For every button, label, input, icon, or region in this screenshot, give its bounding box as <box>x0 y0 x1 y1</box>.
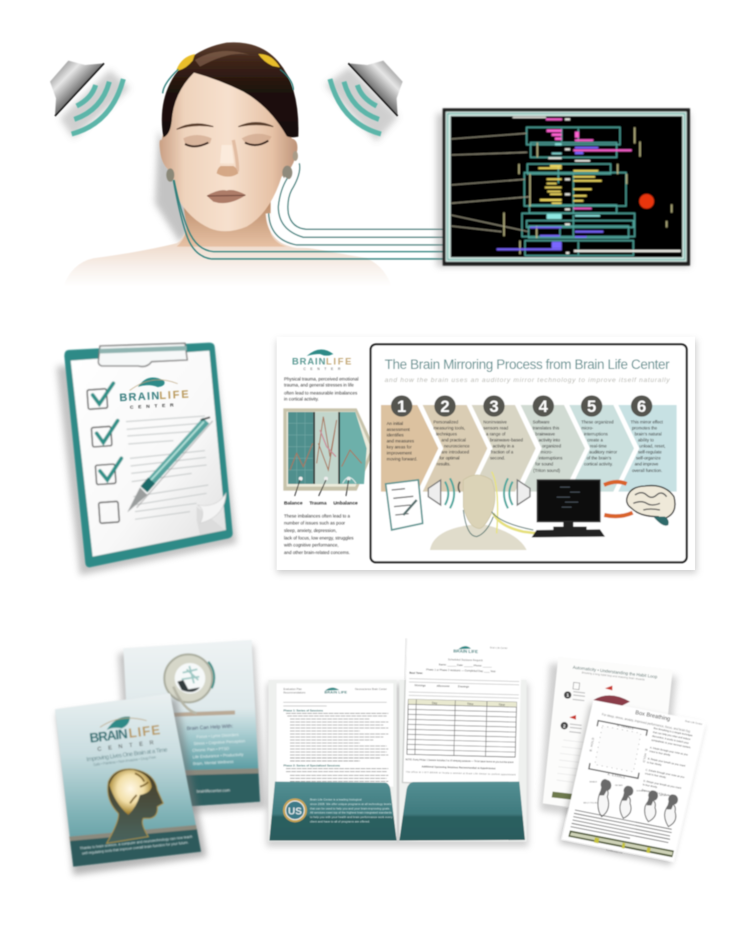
logo: LIFE <box>159 388 189 402</box>
step 4 text: interruptions <box>539 455 562 460</box>
nose <box>217 166 238 177</box>
step 6 text: ability to <box>638 437 654 442</box>
step 6 text: brain's natural <box>635 431 662 436</box>
intro text: trauma, and general stresses in life <box>284 382 354 387</box>
breathing instructions: to four slowly. <box>647 761 662 767</box>
breathing instructions: B. Retain your breath as you count <box>647 757 686 768</box>
folder body <box>268 680 397 842</box>
step 6 text: promotes the <box>632 425 658 430</box>
right sheet with log table: Time <box>467 702 474 706</box>
panel: Brain Mirroring Process sheet <box>277 337 697 573</box>
form lines <box>126 416 208 519</box>
step 2 text: measuring tools, <box>433 425 465 430</box>
step 6 text: and improve <box>635 461 659 466</box>
step 4 text: micro- <box>541 449 553 454</box>
checkboxes <box>87 389 119 523</box>
yellow electrode pads <box>177 54 195 71</box>
intro text: in cortical activity. <box>284 397 319 402</box>
sheet footer: brainlifecenter.com <box>606 849 623 855</box>
front sheet <box>559 700 706 865</box>
left sheet: Phase 2: Series of Specialized Sessions <box>283 764 340 768</box>
icon: left speaker with sound waves <box>50 61 130 138</box>
breathing postures <box>598 779 678 827</box>
brain readout: pale lead lines <box>451 133 530 232</box>
step 5 text: of the brain's <box>587 455 611 460</box>
logo: LIFE <box>326 357 351 367</box>
closing text: lack of focus, low energy, struggles <box>284 535 354 540</box>
closing text: with cognitive performance, <box>284 542 339 547</box>
ear electrodes <box>166 168 174 182</box>
step 3 text: activity in a <box>493 443 515 448</box>
icon: assessment clipboard <box>386 480 423 530</box>
right sheet with log table: Scheduled Sessions Request <box>448 657 483 662</box>
closing text: These imbalances often lead to a <box>284 513 351 518</box>
breathing box diagram: B. HOLD <box>642 748 648 764</box>
left sheet: BRAIN LIFE <box>324 690 347 695</box>
eyebrows <box>177 124 213 129</box>
logo: BRAIN <box>119 390 160 404</box>
back sheet <box>543 657 673 820</box>
chart labels: Trauma <box>309 500 327 506</box>
pocket text: since 2008. We offer unique programs at all technology levels <box>310 802 392 806</box>
icon: left small speaker <box>428 478 460 508</box>
brain wheel graphic <box>164 654 214 702</box>
folder with forms <box>267 637 528 847</box>
breathing instructions: sympathetic to your nervous system. <box>651 739 692 749</box>
step numbers: 3 <box>489 397 499 416</box>
right pocket <box>399 782 525 841</box>
intro text: often lead to measurable imbalances <box>284 391 358 396</box>
step 5 text: These organized <box>581 419 614 424</box>
right sheet with log table: Brain Life Center <box>490 646 508 650</box>
brain readout: pink bars <box>546 118 632 209</box>
illustration: patient head <box>430 472 537 550</box>
logo: CENTER <box>303 367 345 371</box>
breathing instructions: Box Breathing is a simple technique <box>653 727 693 738</box>
logo: BRAIN <box>292 357 326 367</box>
pocket text: client and have to all of programs are offered. <box>310 819 370 823</box>
icon: orange feedback arrows <box>604 482 633 516</box>
posture labels: BELLY FILLED <box>583 802 598 804</box>
hair <box>162 42 298 137</box>
booklet: back cover: Stress • Cognitive Perception <box>193 738 245 746</box>
left sheet: Evaluation Plan <box>283 687 302 691</box>
brain readout: yellow bars <box>538 165 602 204</box>
step 6 text: unload, reset, <box>639 443 666 448</box>
right sheet with log table: Afternoons <box>437 684 450 688</box>
right sheet with log table: Name: ______ Date: ______ Phone: ______ <box>439 662 492 668</box>
booklet: back cover: Chronic Pain • PTSD <box>192 746 229 753</box>
photo: woman's head and shoulders <box>63 42 392 287</box>
clipboard with checklist <box>57 343 237 575</box>
step 5 text: interruptions <box>584 431 608 436</box>
booklet: front cover: LIFE <box>128 722 161 741</box>
booklet: back cover <box>118 640 267 817</box>
step numbers: 4 <box>539 397 549 416</box>
step 1 text: improvement <box>387 450 412 455</box>
booklet: front cover <box>55 693 207 875</box>
icon: brain <box>627 486 675 526</box>
breathing instructions: Repeat steps 1-4 for 5 minutes <box>641 789 676 798</box>
step 6 text: self-organize <box>636 455 661 460</box>
pocket text: that can be used to help you and your brain-improving goals. <box>310 806 390 810</box>
step 1 text: assessment <box>387 427 411 432</box>
posture labels: RETAIN <box>659 794 668 797</box>
step 5 text: micro- <box>581 425 594 430</box>
step 1 text: and measures <box>387 439 414 444</box>
step 2 text: are introduced <box>441 449 470 454</box>
breathing box diagram: B. HOLD <box>589 737 595 752</box>
posture labels: EXHALE <box>637 790 646 793</box>
front sheet: Brain Life Center <box>685 720 703 726</box>
closing text: number of issues such as poor <box>284 520 346 525</box>
process frame <box>371 344 687 562</box>
gold seal <box>283 798 307 822</box>
wires to monitor <box>163 69 447 259</box>
step 3 text: fraction of a <box>491 449 514 454</box>
right sheet with log table: Evenings <box>458 684 470 689</box>
step 4 text: for sound <box>535 461 554 466</box>
process chevrons <box>381 405 677 492</box>
closing text: sleep, anxiety, depression, <box>284 528 337 533</box>
lips <box>207 190 246 203</box>
board <box>64 343 233 567</box>
breathing instructions: count to four slowly. <box>649 750 671 757</box>
step 2 text: results. <box>437 461 451 466</box>
step 5 text: auditory mirror <box>589 449 618 454</box>
booklet: front cover: BRAIN <box>89 726 129 746</box>
step 4 text: (Triton sound) <box>533 468 561 473</box>
step 2 text: techniques <box>436 431 457 436</box>
logo <box>107 716 130 730</box>
left pocket <box>269 782 397 841</box>
step 4 text: translates this <box>533 425 559 430</box>
step 3 text: a range of <box>486 431 506 436</box>
right sheet with log table: Additional Upcoming Sessions Recommended at Appointment <box>422 765 496 770</box>
title: The Brain Mirroring Process from Brain Life Center <box>385 357 670 372</box>
breathing instructions: count to four slowly. <box>645 772 667 779</box>
right sheet with log table: The office at 1-877-BRAIN or locate a session at Brain Life Center to confirm appointment <box>406 771 516 776</box>
step 4 text: brainwave <box>535 431 556 436</box>
step 1 text: key areas for <box>387 444 412 449</box>
closing text: and other brain-related concerns. <box>284 550 350 555</box>
breathing box diagram <box>585 719 652 783</box>
step 4 text: activity into <box>539 437 561 442</box>
worksheets: habit loop and box breathing <box>540 657 706 865</box>
step numbers: 1 <box>397 397 406 416</box>
step 2 text: and practical <box>441 437 466 442</box>
step 6 text: This mirror effect <box>631 419 664 424</box>
subtitle: and how the brain uses an auditory mirror technology to improve itself naturally <box>385 377 670 384</box>
step numbers <box>391 395 652 417</box>
head silhouette with glowing brain <box>107 769 163 843</box>
red marker <box>639 194 654 209</box>
step numbers: 2 <box>440 397 450 416</box>
right sheet with log table <box>402 637 522 786</box>
step 5 text: create a <box>587 437 604 442</box>
step numbers: 6 <box>637 397 646 416</box>
ruler bar <box>568 830 674 857</box>
left sheet: Recommendations <box>283 690 306 694</box>
logo: CENTER <box>130 402 178 411</box>
booklet: back cover: brainlifecenter.com <box>197 787 231 794</box>
breathing instructions: D. Retain your breath as you count <box>643 780 682 790</box>
right sheet with log table: Mornings <box>415 683 426 687</box>
footer text: Thanks to brain science, a computer and neurotechnology can now teach <box>80 835 193 850</box>
step 5 text: real-time <box>590 443 607 448</box>
pocket text: to help you with your health and brain performance work every <box>310 815 393 819</box>
right sheet with log table: Phase 1 or Phase 2 sessions — Completed Day ____ Year <box>426 667 496 673</box>
illustration: woman with electrodes and speakers <box>50 42 447 287</box>
back cover text: Brain Can Help With: <box>187 724 233 732</box>
step numbers: 5 <box>587 397 596 416</box>
icon: right speaker with sound waves <box>325 61 403 142</box>
breathing instructions: discomfort. It works to switch your <box>652 735 689 745</box>
chart labels: Balance <box>284 500 303 506</box>
booklet: back cover: Focus • Lyme Disorders <box>196 732 239 739</box>
tagline: Improving Lives One Brain at a Time <box>86 747 169 763</box>
step 4 text: Software <box>533 419 550 424</box>
posture labels: RETAIN <box>615 784 623 787</box>
step 4 text: organized <box>542 443 562 448</box>
step 6 text: overall function. <box>632 468 662 473</box>
step 2 text: neuroscience <box>444 443 470 448</box>
step 5 text: cortical activity. <box>584 461 613 466</box>
right sheet with log table: Time <box>498 703 505 707</box>
logo <box>292 349 351 371</box>
gold seal: US <box>288 806 302 817</box>
front sheet: For sleep, stress, anxiety, improved performance, focus, and brain fog <box>601 712 691 734</box>
footer text: self-regulating tools that improve overall brain function for your future. <box>82 840 189 856</box>
body text lines <box>571 810 672 843</box>
brain readout: cyan and white bars <box>547 143 600 219</box>
booklet: back cover: Brain, Mental Wellness <box>193 759 234 766</box>
monitor with brain-activity display <box>437 108 690 267</box>
step 2 text: Personalized <box>433 419 459 424</box>
step 3 text: brainwave-based <box>490 437 524 442</box>
step 2 text: for optimal <box>439 455 460 460</box>
right sheet with log table: Day <box>432 701 438 705</box>
logo <box>118 376 189 411</box>
pocket text: All services meet top of the highest brain integrated standards <box>310 811 392 815</box>
closed eyes <box>183 135 212 145</box>
breathing box diagram: A. INHALE <box>617 723 635 731</box>
breathing box diagram: A. EXHALE <box>607 772 626 780</box>
paper <box>71 351 226 557</box>
left sheet: Phase 1: Series of Sessions <box>283 708 323 712</box>
step 3 text: sensors read <box>483 425 509 430</box>
brain readout: purple and blue bars <box>497 147 603 250</box>
booklet: back cover: Life Endurance • Productivity <box>192 752 244 759</box>
chart labels: Unbalance <box>333 500 358 506</box>
subline: Safe • Painless • Non-Invasive • Drug Free <box>93 755 156 767</box>
right sheet with log table: NOTE: Every Phase 1 Session Includes 2 to 10 sleeping sessions — To be taken home as you live this space <box>405 758 514 764</box>
intro text: Physical trauma, perceived emotional <box>284 377 359 382</box>
breathing instructions: to four slowly. <box>642 783 658 789</box>
step 1 text: An initial <box>387 421 403 426</box>
posture labels: INHALE <box>589 781 598 784</box>
chart: balance trauma unbalance brainwave panels <box>283 408 375 496</box>
brain readout: teal brackets <box>522 127 635 256</box>
pen <box>127 417 213 512</box>
illustration: computer and keyboard <box>532 480 605 537</box>
step 6 text: self-regulate <box>638 449 662 454</box>
back sheet: 1 <box>566 693 569 698</box>
step 3 text: second. <box>490 455 505 460</box>
center wordmark: CENTER <box>97 739 161 753</box>
step 1 text: identifies <box>387 433 404 438</box>
left sheet <box>277 683 393 787</box>
back sheet: Breaking a long habit loop and restoring brain rewards <box>582 670 646 682</box>
right sheet with log table: BRAIN LIFE <box>453 648 478 654</box>
step 3 text: Noninvasive <box>483 419 507 424</box>
sheet title: Box Breathing <box>635 710 671 723</box>
breathing instructions: C. Exhale through your nose as you <box>645 769 685 779</box>
check marks <box>93 383 121 480</box>
back sheet: 2 <box>563 723 566 728</box>
breathing instructions: that can help you relax and reduce <box>653 731 691 741</box>
icon: right small speaker <box>504 478 530 508</box>
pocket text: Brain Life Center is a leading biological <box>310 798 362 802</box>
right sheet with log table: Best Time: <box>409 671 423 675</box>
breathing instructions: A. Inhale through your nose as you <box>650 746 689 757</box>
clip <box>98 343 187 367</box>
left sheet: Neuroscience Brain Center <box>355 687 387 691</box>
back sheet: Automaticity • Understanding the Habit Loop <box>573 665 658 679</box>
step 1 text: moving forward. <box>387 457 417 462</box>
